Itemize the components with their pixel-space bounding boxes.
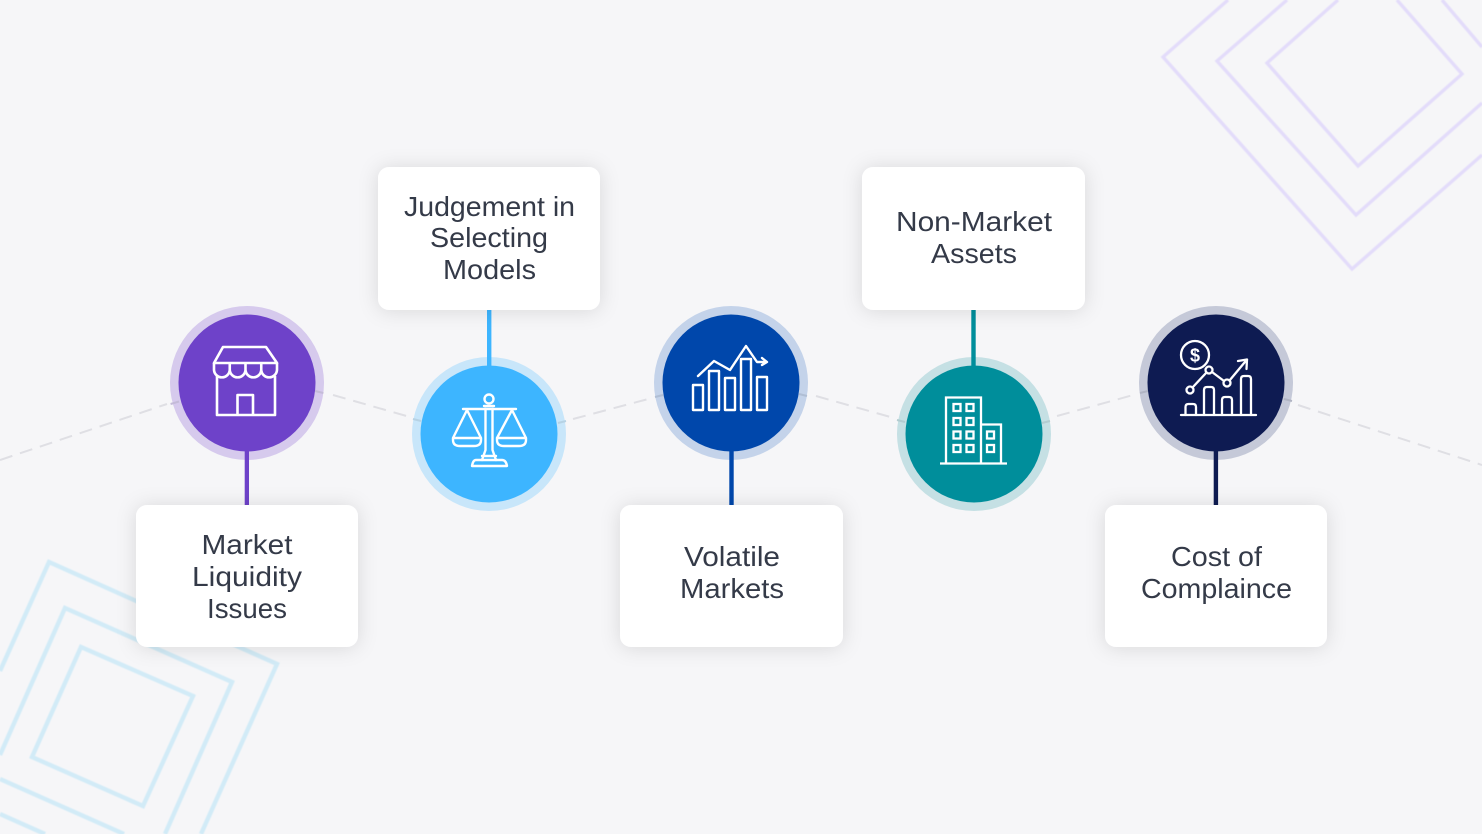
icon: buildings xyxy=(940,398,1007,464)
connector 4 xyxy=(971,309,976,366)
connector 5 xyxy=(1214,451,1218,506)
card 4: Non-Market xyxy=(896,206,1052,237)
card 3: Volatile xyxy=(684,541,780,572)
card 1: Market xyxy=(202,529,293,560)
card 2: Judgement in xyxy=(404,191,575,222)
card 2: Selecting xyxy=(430,222,548,253)
icon: dollar and growth chart: $ xyxy=(1190,346,1200,366)
card 4 xyxy=(862,167,1085,310)
step 3: volatile markets xyxy=(620,306,843,647)
card 5 xyxy=(1105,505,1327,647)
node 3 xyxy=(654,306,808,460)
icon: bar chart with trend xyxy=(693,346,767,410)
card 2 xyxy=(378,167,600,310)
dashed timeline xyxy=(0,394,1482,465)
node 4 xyxy=(897,357,1051,511)
card 4: Assets xyxy=(931,238,1017,269)
card 2: Models xyxy=(443,254,536,285)
node 1 xyxy=(170,306,324,460)
icon: store xyxy=(214,347,277,415)
connector 2 xyxy=(487,309,491,366)
icon: scales xyxy=(453,394,526,466)
connector 1 xyxy=(245,451,249,506)
icon: dollar and growth chart xyxy=(1181,341,1256,415)
card 3: Markets xyxy=(680,573,784,604)
card 1: Liquidity xyxy=(192,561,302,592)
card 1 xyxy=(136,505,358,647)
card 1: Issues xyxy=(207,593,287,624)
node 5 xyxy=(1139,306,1293,460)
node 2 xyxy=(412,357,566,511)
step 4: non-market assets xyxy=(862,167,1085,511)
step 1: market liquidity issues xyxy=(136,306,358,647)
decoration: blue squares bottom left xyxy=(0,562,277,834)
connector 3 xyxy=(729,451,734,506)
step 5: cost of compliance xyxy=(1105,306,1327,647)
card 5: Complaince xyxy=(1141,573,1292,604)
step 2: judgement in selecting models xyxy=(378,167,600,511)
decoration: purple diamonds top right xyxy=(1163,0,1482,269)
card 3 xyxy=(620,505,843,647)
card 5: Cost of xyxy=(1171,541,1262,572)
